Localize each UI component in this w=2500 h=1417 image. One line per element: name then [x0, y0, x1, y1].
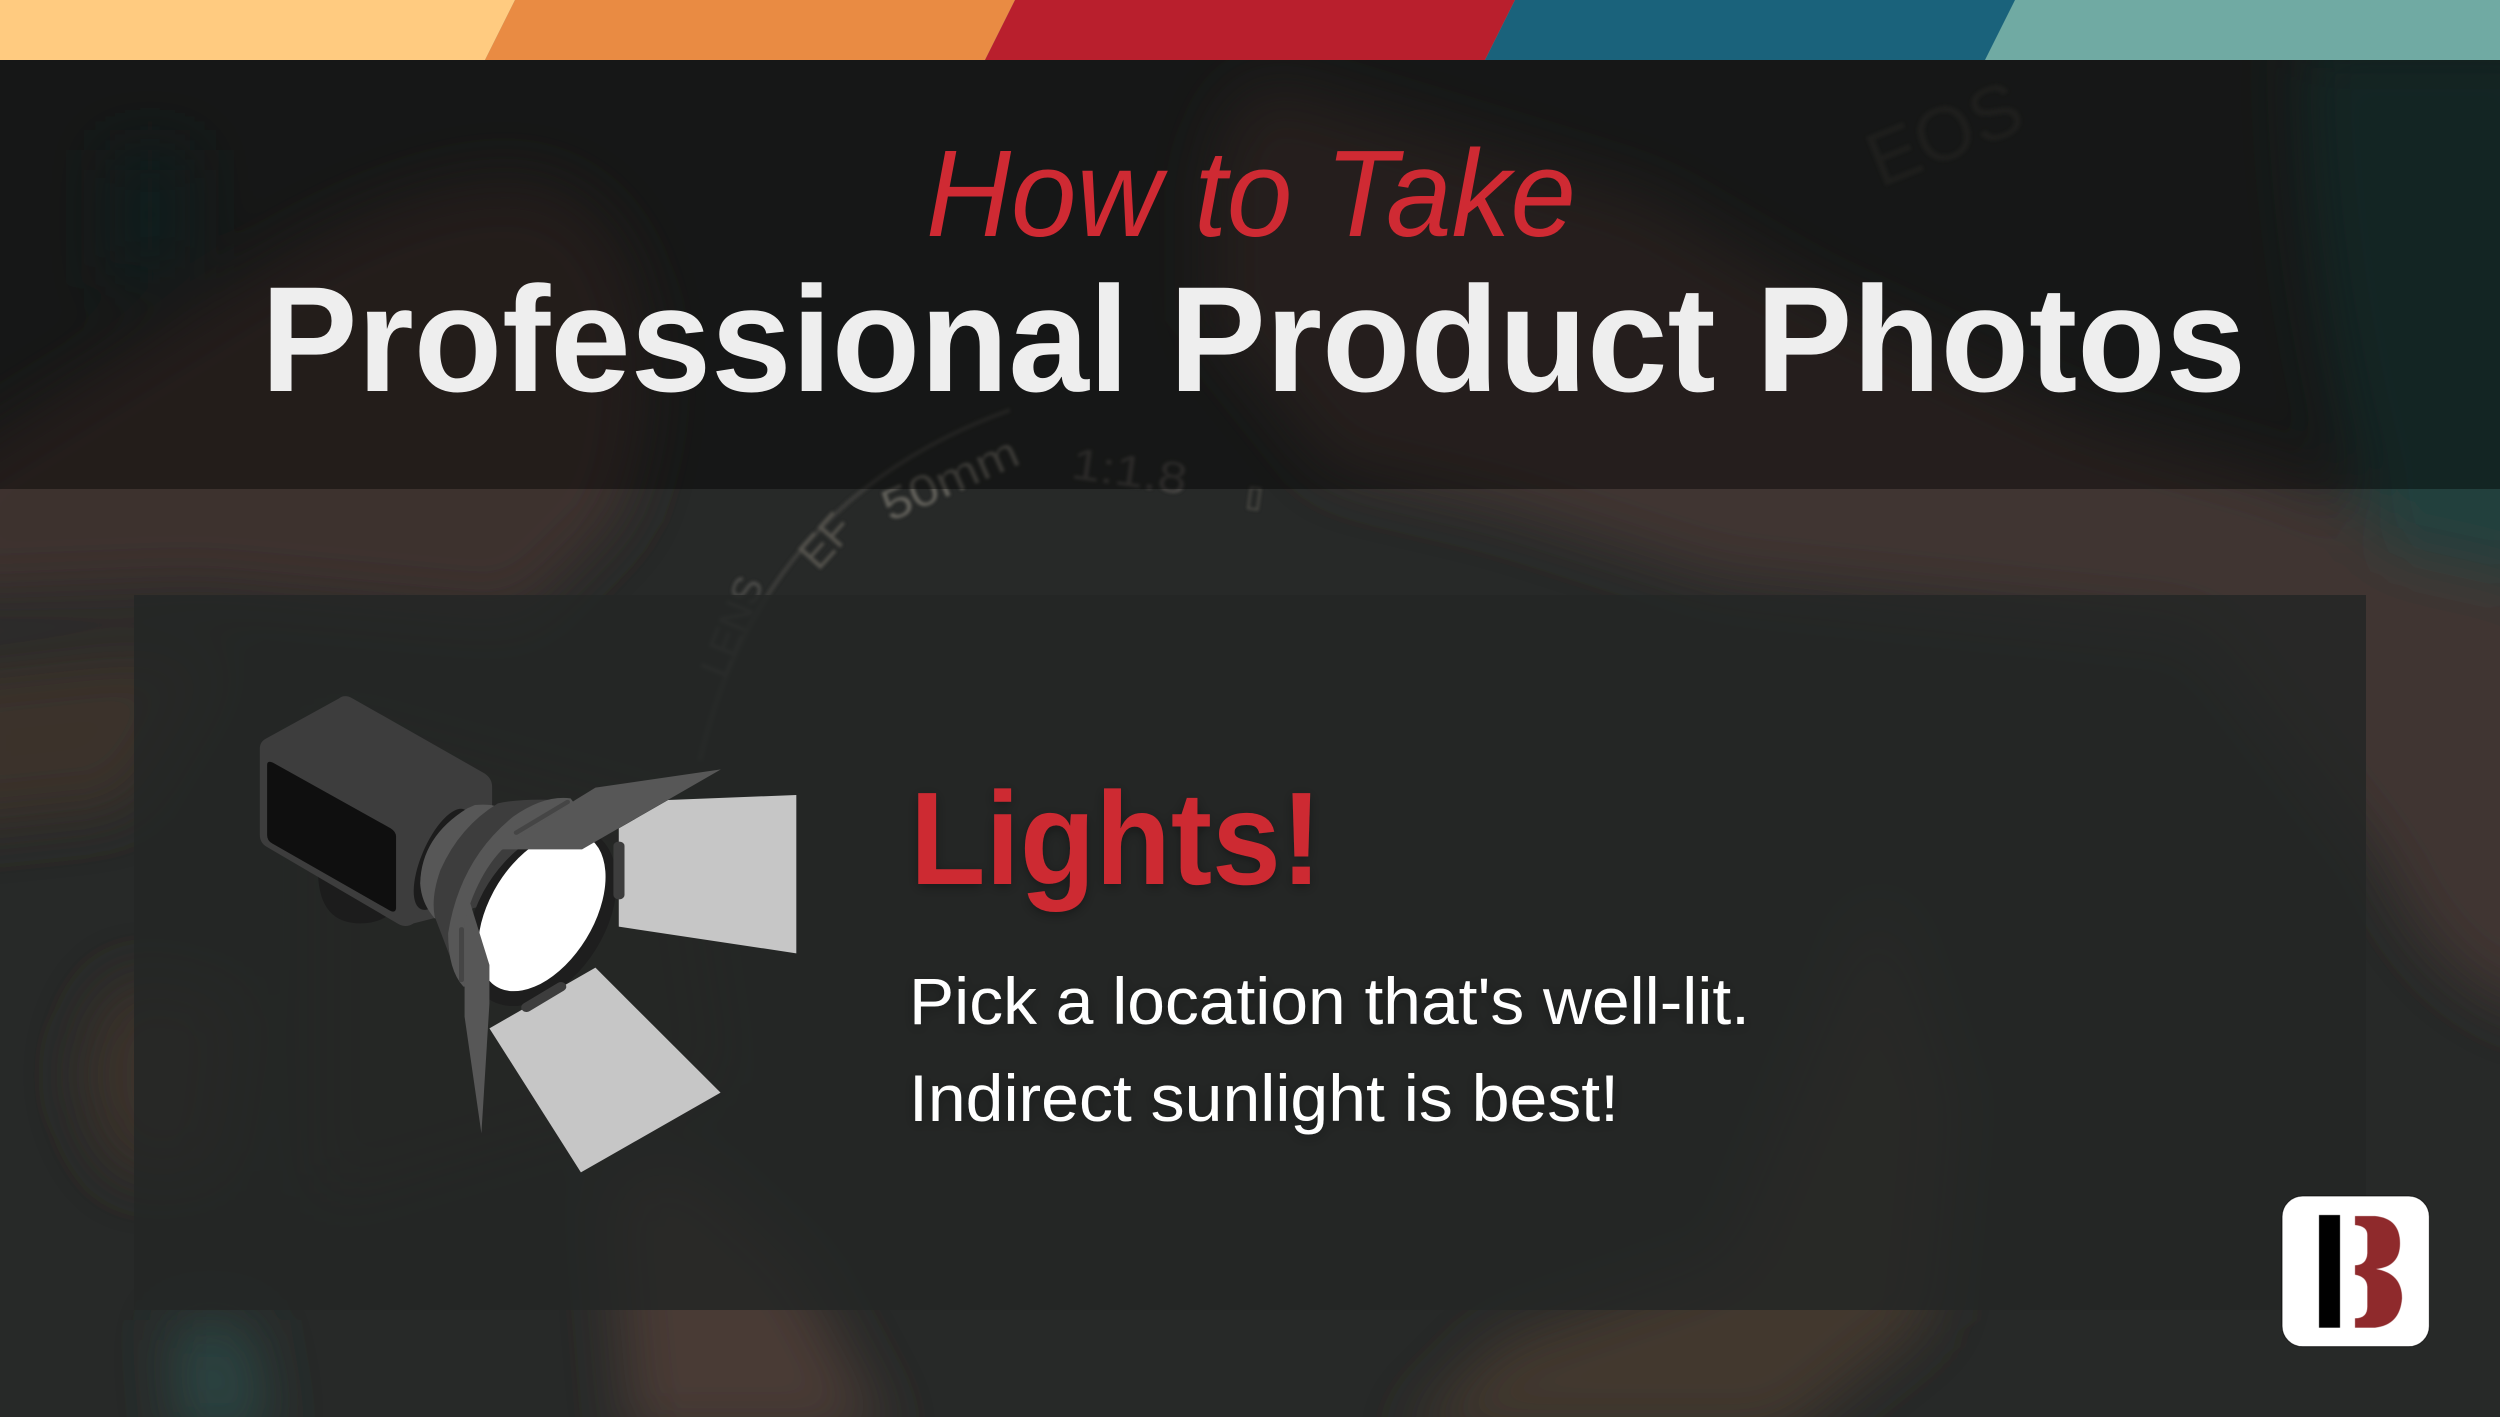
- title line: Professional Product Photos: Professional Product Photos: [261, 255, 2246, 423]
- header band: [0, 59, 2500, 489]
- lamp body: [260, 696, 492, 926]
- title line: How to Take: How to Take: [926, 126, 1576, 263]
- icon: studio spotlight with barn doors: [260, 696, 796, 1172]
- heading: Lights!: Lights!: [910, 765, 1322, 912]
- content panel: [134, 595, 2366, 1310]
- background photo: hands holding a camera: EF: [789, 504, 863, 579]
- lens rim: [437, 807, 647, 1027]
- back panel: [267, 762, 396, 912]
- bottom barn door: [489, 968, 721, 1172]
- mount shadow: [318, 870, 389, 923]
- right barn door: [619, 795, 796, 953]
- line one: Pick a location that's well-lit.: [909, 964, 1750, 1038]
- colour stripe: [0, 0, 2500, 60]
- top barn door: [500, 769, 721, 849]
- neck: [402, 803, 484, 916]
- line two: Indirect sunlight is best!: [909, 1061, 1619, 1135]
- logo: [2282, 1196, 2429, 1347]
- housing front rim: [448, 798, 574, 987]
- logo red B: [2355, 1216, 2402, 1328]
- body text: [909, 964, 1750, 1135]
- background photo: hands holding a camera: EOS: [1855, 65, 2035, 204]
- left barn door: [465, 903, 489, 1133]
- background photo: hands holding a camera: LENS: [693, 570, 772, 683]
- housing rings: [420, 805, 500, 918]
- background photo: hands holding a camera: ▯: [1244, 479, 1265, 514]
- light: [452, 815, 632, 1008]
- background photo: hands holding a camera: 1:1.8: [1069, 439, 1190, 504]
- title: [261, 126, 2246, 423]
- logo tile: [2282, 1196, 2429, 1347]
- logo black bar: [2319, 1215, 2340, 1328]
- background photo: hands holding a camera: 50mm: [874, 427, 1027, 531]
